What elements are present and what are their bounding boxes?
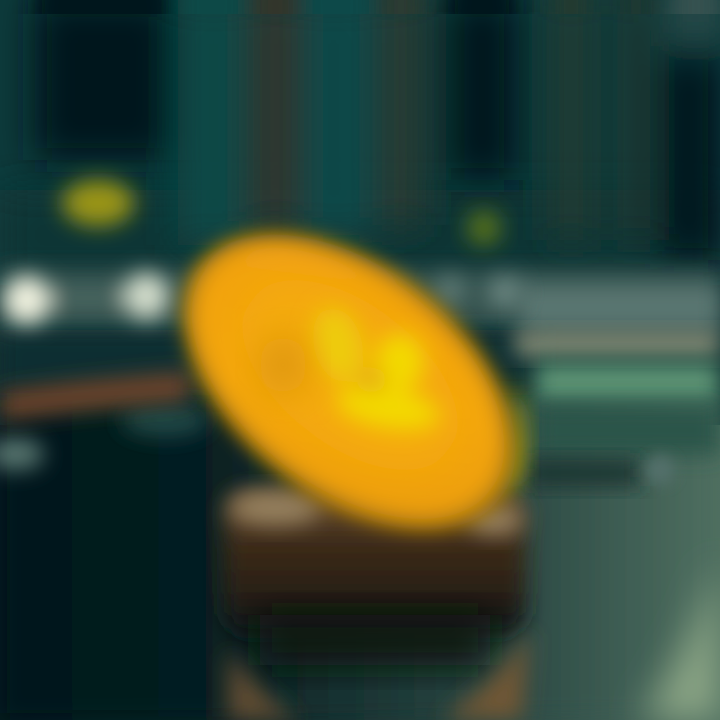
background: yellow glow left <box>62 180 134 226</box>
background: lower floor <box>0 362 720 720</box>
coin: golden disc <box>130 175 570 589</box>
lights: left white spots <box>0 273 523 470</box>
copper stripe left <box>0 372 190 420</box>
background: vertical columns <box>35 0 720 260</box>
coin: bright central symbol <box>305 302 443 437</box>
coin: darker left mark <box>259 335 307 395</box>
background: column tops <box>35 0 720 14</box>
background: middle band <box>0 270 720 395</box>
base: brown stand under coin <box>224 490 530 720</box>
coin: inner glow <box>208 243 492 507</box>
background: upper wall <box>0 0 720 285</box>
background: yellow glow right <box>467 210 501 246</box>
